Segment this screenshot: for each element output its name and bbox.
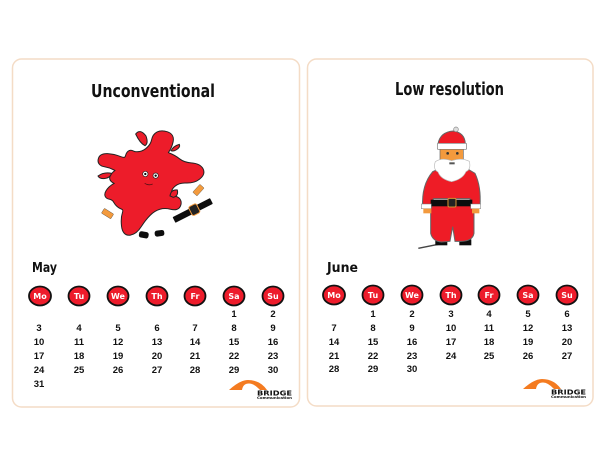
weekday badges: June: Fr	[485, 291, 494, 300]
dates: June: 5	[525, 309, 531, 320]
dates: May: 17	[34, 351, 44, 362]
heading: Low resolution: Low resolution	[395, 79, 504, 100]
dates: June: 30	[407, 364, 417, 375]
logo: Bridge Communication	[523, 379, 587, 399]
dates: May: 27	[152, 365, 162, 376]
dates: May: 10	[34, 337, 44, 348]
dates: June: 27	[562, 351, 572, 362]
dates: May: 25	[74, 365, 85, 376]
logo: Bridge Communication: Communication	[551, 395, 587, 399]
dates: June: 15	[368, 337, 379, 348]
dates: June: 20	[562, 337, 572, 348]
weekday badges: May: We	[111, 292, 126, 301]
dates: May: 31	[34, 379, 45, 390]
dates: June: 17	[446, 337, 456, 348]
dates: May: 2	[270, 309, 276, 320]
dates: June: 19	[523, 337, 533, 348]
icon: red splat with belt	[98, 132, 213, 239]
dates: May: 12	[113, 337, 123, 348]
dates: June: 11	[484, 323, 495, 334]
dates: June: 1	[370, 309, 376, 320]
dates: May: 4	[76, 323, 82, 334]
weekday badges: June: Th	[445, 291, 457, 300]
dates: June: 24	[446, 351, 457, 362]
dates: May: 30	[268, 365, 278, 376]
weekday badges: June: Mo	[327, 291, 341, 300]
dates: June: 12	[523, 323, 533, 334]
heading: June: June	[326, 261, 358, 276]
dates: May: 16	[268, 337, 278, 348]
dates: June: 28	[329, 364, 339, 375]
dates: May: 5	[115, 323, 121, 334]
dates: May: 28	[190, 365, 200, 376]
dates: May: 3	[36, 323, 42, 334]
weekday badges: June	[323, 286, 578, 304]
weekday badges: May	[29, 286, 284, 306]
dates: May: 29	[229, 365, 239, 376]
heading: May: May	[32, 261, 57, 276]
dates: May: 23	[268, 351, 278, 362]
weekday badges: May: Sa	[228, 292, 240, 301]
logo: Bridge Communication: BRIDGE	[257, 390, 292, 398]
weekday badges: May: Tu	[74, 292, 84, 301]
dates: June: 21	[329, 351, 340, 362]
dates: June: 26	[523, 351, 533, 362]
dates: June: 9	[409, 323, 415, 334]
dates: June: 2	[409, 309, 415, 320]
panel: May calendar card	[12, 59, 300, 407]
dates: June	[329, 309, 572, 375]
weekday badges: May: Th	[151, 292, 163, 301]
dates: June: 29	[368, 364, 378, 375]
dates: May: 20	[152, 351, 162, 362]
weekday badges: June: Tu	[368, 291, 378, 300]
weekday badges: June: Su	[561, 291, 573, 300]
weekday badges: June: We	[405, 291, 420, 300]
logo: Bridge Communication	[229, 380, 293, 400]
heading: Unconventional: Unconventional	[91, 81, 215, 102]
dates: June: 16	[407, 337, 417, 348]
dates: June: 4	[486, 309, 492, 320]
dates: June: 22	[368, 351, 378, 362]
dates: June: 13	[562, 323, 572, 334]
dates: June: 23	[407, 351, 417, 362]
dates: June: 10	[446, 323, 456, 334]
dates: May: 6	[154, 323, 160, 334]
dates: May: 8	[231, 323, 237, 334]
weekday badges: May: Su	[267, 292, 279, 301]
dates: May: 14	[190, 337, 201, 348]
dates: June: 6	[564, 309, 570, 320]
dates: May: 9	[270, 323, 276, 334]
dates: May: 13	[152, 337, 162, 348]
dates: June: 3	[448, 309, 454, 320]
dates: May: 11	[74, 337, 85, 348]
dates: May: 24	[34, 365, 45, 376]
dates: May: 21	[190, 351, 201, 362]
dates: May: 19	[113, 351, 123, 362]
dates: May: 26	[113, 365, 123, 376]
weekday badges: May: Fr	[191, 292, 200, 301]
dates: May: 18	[74, 351, 84, 362]
dates: June: 18	[484, 337, 494, 348]
dates: June: 8	[370, 323, 376, 334]
dates: June: 25	[484, 351, 495, 362]
dates: May	[34, 309, 278, 390]
dates: May: 22	[229, 351, 239, 362]
logo: Bridge Communication: Communication	[257, 396, 293, 400]
dates: June: 7	[331, 323, 337, 334]
dates: May: 15	[229, 337, 240, 348]
dates: May: 1	[231, 309, 237, 320]
dates: June: 14	[329, 337, 340, 348]
icon: low-resolution Santa	[418, 127, 481, 248]
dates: May: 7	[192, 323, 198, 334]
weekday badges: June: Sa	[522, 291, 534, 300]
logo: Bridge Communication: BRIDGE	[551, 388, 586, 396]
weekday badges: May: Mo	[33, 292, 47, 301]
panel: June calendar card	[308, 59, 593, 406]
